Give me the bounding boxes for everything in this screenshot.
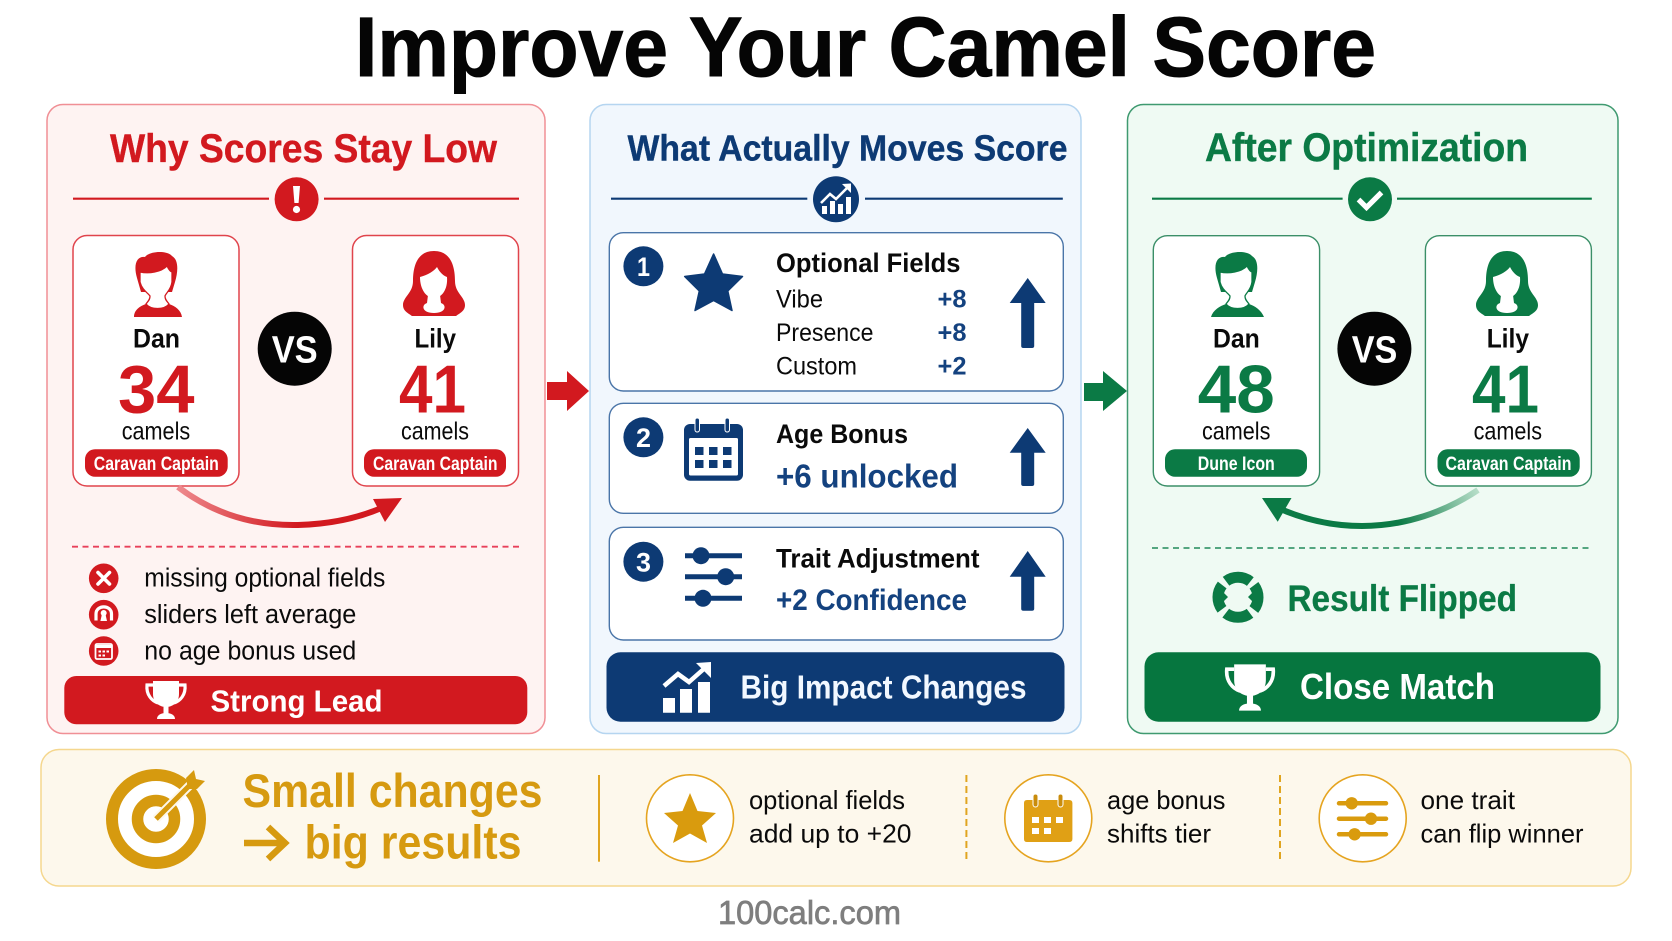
VS badge xyxy=(1337,312,1411,386)
value: +6 unlocked xyxy=(776,458,958,495)
field rows xyxy=(776,286,967,380)
icon: man xyxy=(1211,252,1264,317)
arrow: red flow xyxy=(547,371,589,411)
name: Lily xyxy=(414,323,456,353)
tier badge xyxy=(85,449,228,477)
card heading: Age Bonus xyxy=(776,419,908,449)
icon: check xyxy=(1348,177,1392,221)
tier badge: Caravan Captain xyxy=(373,454,498,475)
takeaway text: big results xyxy=(304,816,522,868)
number badge: 2 xyxy=(636,423,651,453)
icon: star xyxy=(664,793,716,843)
icon: star xyxy=(685,254,742,310)
item: age bonus: age bonus xyxy=(1107,785,1226,815)
field rows: Vibe xyxy=(776,286,823,314)
result text: Result Flipped xyxy=(1288,578,1517,619)
arrow: up xyxy=(1010,551,1046,611)
tier badge: Caravan Captain xyxy=(94,454,219,475)
field rows: +8 xyxy=(938,319,967,347)
unit: camels xyxy=(1474,418,1542,446)
arrow: Dan overtakes Lily xyxy=(1262,490,1478,526)
item: trait: one trait xyxy=(1420,785,1516,815)
heading: Why Scores Stay Low xyxy=(110,127,498,171)
icon: trophy xyxy=(147,681,185,719)
unit: camels xyxy=(401,418,469,446)
icon: calendar xyxy=(89,636,118,666)
reasons list xyxy=(89,564,385,666)
name: Dan xyxy=(133,323,180,353)
tier badge xyxy=(364,449,506,477)
panel: after optimization xyxy=(1128,104,1618,734)
icon: calendar xyxy=(1024,794,1072,842)
arrow: up xyxy=(1010,428,1046,486)
item: age bonus xyxy=(1005,775,1226,862)
score: 48 xyxy=(1198,352,1275,428)
arrow: leads to xyxy=(244,827,285,859)
tier badge: Dune Icon xyxy=(1198,454,1275,475)
field rows: Presence xyxy=(776,319,874,347)
icon: man xyxy=(134,252,182,317)
reason: sliders left average xyxy=(144,601,356,629)
arrow: Dan trails Lily xyxy=(178,487,402,525)
unit: camels xyxy=(1202,418,1270,446)
icon: warning xyxy=(275,177,319,221)
arrow: green flow xyxy=(1084,371,1127,411)
number badge xyxy=(623,417,663,457)
card heading: Trait Adjustment xyxy=(776,544,980,574)
panel: takeaway xyxy=(41,750,1631,886)
icon: x xyxy=(89,564,118,593)
icon: woman xyxy=(1476,251,1538,316)
reason: no age bonus used xyxy=(144,638,356,666)
field rows: +8 xyxy=(938,286,967,314)
tier badge xyxy=(1165,449,1307,477)
panel: what actually moves score xyxy=(590,104,1081,734)
card: Lily xyxy=(352,236,518,486)
title: Improve Your Camel Score xyxy=(355,0,1376,94)
number badge xyxy=(623,542,663,582)
item: optional fields: optional fields xyxy=(749,785,905,815)
name: Dan xyxy=(1213,323,1260,353)
icon: sliders xyxy=(1339,797,1386,840)
card heading: Optional Fields xyxy=(776,248,960,278)
banner: close match: Close Match xyxy=(1300,666,1495,707)
VS badge: VS xyxy=(272,330,318,372)
icon: calendar xyxy=(684,418,743,481)
unit: camels xyxy=(122,418,190,446)
value: +2 Confidence xyxy=(776,584,967,617)
arrow: up xyxy=(1010,278,1046,348)
tier badge xyxy=(1438,449,1580,477)
banner: big impact changes xyxy=(606,652,1064,722)
card: trait adjustment xyxy=(609,527,1063,640)
banner: close match xyxy=(1144,652,1600,722)
card: Lily xyxy=(1425,236,1591,486)
card: age bonus xyxy=(609,403,1063,513)
number badge: 1 xyxy=(637,252,650,282)
number badge: 3 xyxy=(636,548,651,578)
VS badge: VS xyxy=(1352,330,1397,372)
banner: strong lead: Strong Lead xyxy=(210,684,382,719)
takeaway text: Small changes xyxy=(242,764,542,817)
item: trait: can flip winner xyxy=(1420,818,1584,848)
item: age bonus: shifts tier xyxy=(1107,818,1211,848)
icon: trophy xyxy=(1227,664,1273,711)
icon: gauge xyxy=(89,600,118,630)
icon: growth chart xyxy=(813,176,859,222)
icon: result flip xyxy=(1210,569,1266,625)
tier badge: Caravan Captain xyxy=(1446,454,1572,475)
reason: missing optional fields xyxy=(144,564,385,592)
item: optional fields: add up to +20 xyxy=(749,818,912,848)
number badge xyxy=(623,246,663,286)
footer credit: 100calc.com xyxy=(718,894,901,931)
heading: What Actually Moves Score xyxy=(628,128,1068,169)
field rows: Custom xyxy=(776,352,857,380)
takeaway text xyxy=(242,764,542,868)
card: Dan xyxy=(1153,236,1320,486)
icon: growth chart xyxy=(663,662,711,713)
icon: woman xyxy=(403,251,465,316)
item: trait xyxy=(1319,775,1584,862)
field rows: +2 xyxy=(938,352,966,380)
score: 41 xyxy=(399,352,466,428)
item: optional fields xyxy=(646,775,912,862)
name: Lily xyxy=(1487,323,1529,353)
VS badge xyxy=(258,312,332,386)
panel: why scores stay low xyxy=(47,104,545,734)
icon: sliders xyxy=(685,547,742,607)
heading: After Optimization xyxy=(1205,126,1528,170)
card: optional fields xyxy=(609,233,1063,391)
score: 41 xyxy=(1472,352,1539,428)
banner: strong lead xyxy=(64,676,527,724)
banner: big impact changes: Big Impact Changes xyxy=(740,668,1026,705)
icon: target xyxy=(112,770,205,863)
card: Dan xyxy=(73,236,239,486)
score: 34 xyxy=(118,352,195,428)
